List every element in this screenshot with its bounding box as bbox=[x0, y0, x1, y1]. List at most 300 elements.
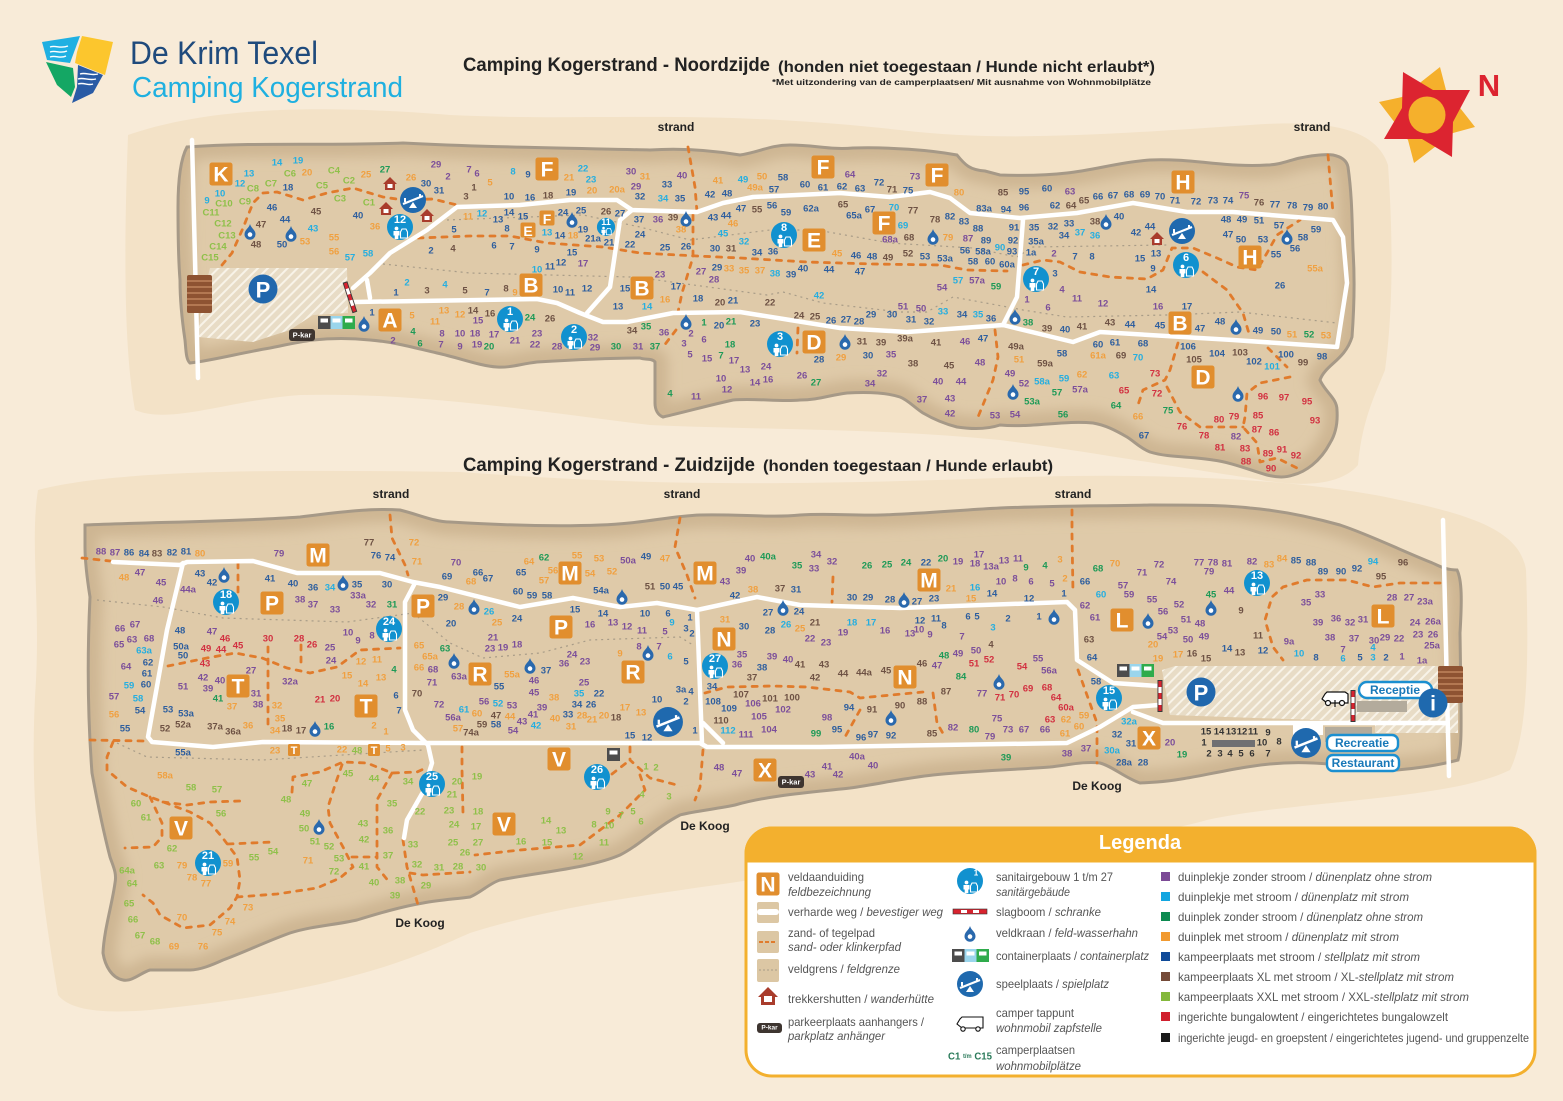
pitch numbers north: 53a bbox=[1024, 396, 1041, 408]
pitch numbers south: 86 bbox=[124, 548, 134, 558]
pitch numbers south: 43 bbox=[819, 660, 829, 670]
pitch numbers north: 73 bbox=[1208, 196, 1218, 206]
pitch numbers north: 11 bbox=[430, 316, 441, 328]
pitch numbers south: 60 bbox=[141, 680, 151, 690]
pitch numbers north: 101 bbox=[1264, 362, 1281, 372]
pitch numbers south: 80 bbox=[969, 724, 979, 736]
pitch numbers north: 32 bbox=[739, 236, 749, 248]
pitch numbers north: 57 bbox=[769, 184, 779, 196]
pitch numbers south: 58 bbox=[542, 590, 552, 602]
pitch numbers north: 48 bbox=[722, 188, 732, 200]
pitch numbers north: 42 bbox=[1131, 228, 1141, 238]
pitch numbers north: 59 bbox=[1059, 374, 1069, 384]
pitch numbers south: 28 bbox=[1387, 592, 1397, 604]
pitch numbers south: 7 bbox=[618, 810, 624, 822]
pitch numbers north: 47 bbox=[1223, 230, 1233, 240]
pitch numbers south: 13 bbox=[1226, 726, 1236, 738]
pitch numbers north: 18 bbox=[470, 328, 480, 340]
pitch numbers south: 70 bbox=[177, 912, 187, 924]
field boundaries north bbox=[383, 215, 1337, 323]
pitch numbers south: 59 bbox=[527, 590, 537, 602]
pitch numbers north: 21 bbox=[726, 316, 737, 328]
pitch numbers north: 90 bbox=[995, 242, 1005, 254]
pitch numbers north: 70 bbox=[1133, 352, 1143, 364]
pitch numbers north: 44 bbox=[1125, 320, 1136, 330]
trailer parking north bbox=[289, 329, 315, 341]
beach labels: strand bbox=[1294, 120, 1330, 134]
pitch numbers north: 60 bbox=[800, 180, 810, 190]
map: north field bbox=[178, 140, 1354, 477]
recreation label bbox=[1327, 735, 1398, 751]
pitch numbers south: 68 bbox=[1042, 682, 1052, 694]
pitch numbers south: 35 bbox=[792, 560, 803, 572]
pitch numbers north: 17 bbox=[1182, 302, 1192, 312]
pitch numbers north: 1a bbox=[1026, 248, 1037, 258]
pitch numbers north: 86 bbox=[1269, 428, 1279, 438]
legend: field letter: veldaanduiding bbox=[788, 870, 864, 884]
pitch numbers south: 82 bbox=[1247, 556, 1257, 568]
pitch numbers north: 49 bbox=[1237, 214, 1247, 226]
pitch numbers north: 88 bbox=[973, 224, 983, 234]
pitch numbers south: 59 bbox=[1079, 710, 1089, 722]
pitch numbers north: 35a bbox=[1028, 236, 1045, 248]
pitch numbers south: 54 bbox=[508, 726, 519, 736]
pitch numbers north: 21 bbox=[564, 172, 575, 184]
pitch numbers south: 36 bbox=[308, 582, 318, 594]
pitch numbers south: 102 bbox=[775, 704, 791, 716]
pitch numbers north: 28 bbox=[854, 316, 864, 328]
pitch numbers south: 1 bbox=[687, 612, 693, 624]
pitch numbers north: 25 bbox=[660, 242, 671, 254]
pitch numbers south: 33 bbox=[809, 564, 819, 574]
pitch numbers south: 6 bbox=[393, 690, 399, 702]
pitch numbers south: 32a bbox=[1121, 716, 1138, 728]
pitch numbers south: 52 bbox=[984, 654, 994, 666]
pitch numbers north: 33 bbox=[662, 180, 672, 190]
pitch numbers north: 48 bbox=[1215, 316, 1225, 328]
pitch numbers north: 60 bbox=[1093, 340, 1103, 350]
pitch numbers south: 45 bbox=[1206, 590, 1217, 600]
pitch numbers south: 44 bbox=[838, 668, 849, 680]
pitch numbers south: 8 bbox=[1012, 574, 1018, 584]
pitch numbers south: 12 bbox=[356, 656, 366, 668]
pitch numbers south: 43 bbox=[195, 568, 205, 580]
pitch numbers south: 8 bbox=[369, 630, 375, 642]
parking north hatched bbox=[198, 268, 348, 342]
pitch numbers south: 19 bbox=[498, 642, 508, 654]
pitch numbers north: 3 bbox=[681, 338, 687, 350]
field letters south bbox=[170, 544, 1394, 840]
pitch numbers north: 11 bbox=[565, 288, 576, 298]
pitch numbers south: 58 bbox=[491, 720, 501, 730]
pitch numbers south: 29 bbox=[863, 592, 873, 604]
pitch numbers south: 28 bbox=[454, 602, 464, 612]
pitch numbers north: 80 bbox=[1318, 202, 1328, 212]
pitch numbers south: 30 bbox=[476, 862, 486, 874]
pitch numbers north: 83 bbox=[959, 216, 969, 228]
pitch numbers south: 27 bbox=[912, 596, 922, 608]
pitch numbers south: 110 bbox=[713, 716, 729, 726]
legend: colour key: duinplekje zonder stroom / dünenplatz ohne strom bbox=[1178, 870, 1432, 884]
beach labels: De Koog bbox=[1072, 779, 1122, 793]
info icon: i bbox=[1430, 692, 1436, 716]
field letters south: L bbox=[1116, 610, 1129, 632]
pitch numbers south: 29 bbox=[1380, 632, 1390, 644]
pitch numbers north: 3 bbox=[424, 286, 430, 296]
pitch numbers south: 45 bbox=[881, 666, 892, 676]
pitch numbers north: 50 bbox=[916, 304, 926, 314]
map: south field bbox=[82, 505, 1463, 980]
pitch numbers north: 29 bbox=[866, 310, 876, 320]
legend: colour key bbox=[1161, 870, 1529, 1045]
pitch numbers south: 50 bbox=[660, 582, 670, 592]
pitch numbers south: 55 bbox=[1147, 594, 1158, 606]
pitch numbers south: 84 bbox=[956, 672, 967, 682]
pitch numbers south: 13 bbox=[556, 826, 566, 836]
pitch numbers south: 11 bbox=[931, 614, 942, 624]
parking sign south bbox=[1186, 678, 1216, 706]
pitch numbers south: 63 bbox=[127, 634, 137, 646]
pitch numbers north: 8 bbox=[503, 284, 509, 294]
legend title: Legenda bbox=[1099, 832, 1182, 854]
legend: sanitary: 1 bbox=[974, 868, 979, 878]
pitch numbers south: 48 bbox=[939, 650, 949, 662]
field letters south: M bbox=[309, 544, 327, 568]
pitch numbers north: 100 bbox=[1278, 350, 1294, 360]
pitch numbers north: 31 bbox=[434, 186, 445, 196]
pitch numbers north: 61a bbox=[1090, 350, 1107, 362]
pitch numbers south: 105 bbox=[751, 712, 768, 722]
pitch numbers north: 52 bbox=[1304, 330, 1314, 340]
pitch numbers south: 11 bbox=[1248, 726, 1259, 738]
pitch numbers south: 1 bbox=[692, 726, 698, 736]
pitch numbers south: 79 bbox=[985, 732, 995, 742]
pitch numbers south: 61 bbox=[1090, 612, 1101, 624]
legend: sand path: zand- of tegelpad bbox=[788, 926, 875, 940]
pitch numbers north: 69 bbox=[1116, 350, 1126, 362]
pitch numbers south: 94 bbox=[844, 702, 855, 714]
barriers south bbox=[1158, 680, 1356, 722]
pitch numbers north: 72 bbox=[874, 178, 884, 188]
pitch numbers north: 47 bbox=[978, 334, 988, 344]
sanitary buildings north: 7 bbox=[1033, 266, 1039, 278]
pitch numbers south: 14 bbox=[987, 588, 998, 600]
pitch numbers south: 14 bbox=[1222, 644, 1233, 654]
pitch numbers north: 17 bbox=[671, 282, 681, 292]
pitch numbers north: 14 bbox=[504, 208, 515, 218]
pitch numbers north: 34 bbox=[752, 248, 763, 258]
legend: paved road: verharde weg / bevestiger weg bbox=[788, 905, 943, 919]
pitch numbers north: 33 bbox=[724, 264, 734, 274]
field letters north: B bbox=[523, 274, 539, 298]
pitch numbers south: 36 bbox=[383, 826, 393, 836]
pitch numbers south: 48 bbox=[281, 794, 291, 806]
pitch numbers north: 55 bbox=[329, 232, 340, 244]
pitch numbers south: 1a bbox=[1417, 656, 1428, 666]
pitch numbers south: 20 bbox=[446, 618, 456, 630]
pitch numbers south: 8 bbox=[636, 642, 642, 652]
dune halo: north bbox=[125, 109, 1392, 484]
pitch numbers north: 70 bbox=[889, 202, 899, 214]
pitch numbers south: 1 bbox=[1201, 738, 1207, 748]
pitch numbers south: 1 bbox=[1036, 612, 1042, 622]
pitch numbers south: 30a bbox=[1104, 746, 1121, 756]
pitch numbers south: 83 bbox=[152, 548, 162, 560]
pitch numbers north: 104 bbox=[1209, 348, 1226, 360]
pitch numbers north: 91 bbox=[1277, 444, 1288, 456]
pitch numbers north: 47 bbox=[256, 220, 266, 230]
pitch numbers south: 47 bbox=[135, 568, 145, 578]
field letters north: F bbox=[541, 158, 554, 182]
pitch numbers north: 20 bbox=[484, 342, 494, 352]
logo shield bbox=[42, 36, 113, 103]
pitch numbers south: 47 bbox=[207, 626, 217, 638]
pitch numbers south: 62 bbox=[167, 844, 177, 854]
pitch numbers south: 56a bbox=[1041, 666, 1058, 676]
pitch numbers north: 64 bbox=[845, 170, 856, 180]
pitch numbers south: 90 bbox=[1336, 566, 1346, 578]
pitch numbers south: 60a bbox=[1058, 702, 1075, 714]
pitch numbers south: 54a bbox=[593, 586, 610, 596]
pitch numbers north: 5 bbox=[487, 178, 493, 188]
sanitary buildings north: 12 bbox=[394, 214, 406, 226]
pitch numbers south: 85 bbox=[927, 728, 938, 740]
pitch numbers north: 8 bbox=[1089, 252, 1095, 262]
pitch numbers north: 27 bbox=[615, 208, 625, 220]
pitch numbers south: 5 bbox=[662, 626, 668, 638]
pitch numbers north: C7 bbox=[265, 178, 277, 190]
pitch numbers north: 14 bbox=[272, 158, 283, 168]
pitch numbers south: 88 bbox=[917, 696, 927, 708]
pitch numbers south: 60 bbox=[1096, 590, 1106, 600]
pitch numbers south: 28 bbox=[885, 594, 895, 606]
pitch numbers south: 8 bbox=[1313, 652, 1319, 664]
pitch numbers north: 53 bbox=[1321, 330, 1331, 342]
pitch numbers south: 17 bbox=[620, 702, 630, 714]
pitch numbers south: 35 bbox=[737, 650, 748, 660]
wooden bridge south bbox=[1438, 666, 1463, 703]
pitch numbers north: 48 bbox=[867, 252, 877, 262]
pitch numbers south: 24 bbox=[512, 614, 523, 624]
legend panel bbox=[746, 828, 1535, 1076]
sanitary buildings north: 6 bbox=[1183, 252, 1189, 264]
pitch numbers north: 13 bbox=[542, 228, 552, 238]
pitch numbers south: 4 bbox=[391, 664, 397, 676]
pitch numbers south: 17 bbox=[974, 550, 984, 560]
pitch numbers south: 30 bbox=[1369, 636, 1379, 646]
pitch numbers south: 5 bbox=[630, 806, 636, 818]
pitch numbers north: 37 bbox=[634, 214, 644, 226]
pitch numbers south: 63 bbox=[1084, 634, 1094, 646]
reception label bbox=[1359, 682, 1432, 698]
pitch numbers south: 50a bbox=[620, 556, 637, 566]
pitch numbers north: 39 bbox=[876, 338, 886, 348]
pitch numbers south: 13 bbox=[1235, 648, 1245, 658]
legend: camper tap: wohnmobil zapfstelle bbox=[996, 1021, 1102, 1035]
pitch numbers south: 51 bbox=[969, 658, 980, 670]
pitch numbers north: 19 bbox=[578, 224, 588, 236]
pitch numbers south: 57 bbox=[453, 724, 463, 734]
pitch numbers south: 39 bbox=[1313, 618, 1323, 628]
pitch numbers north: 57a bbox=[1072, 384, 1089, 396]
legend: trailer parking: parkplatz anhänger bbox=[787, 1029, 886, 1043]
field letters south: X bbox=[758, 760, 772, 782]
pitch numbers north: 44 bbox=[1145, 222, 1156, 232]
pitch numbers south: 21 bbox=[315, 694, 326, 706]
pitch numbers south: 26 bbox=[1428, 630, 1438, 640]
pitch numbers north: 39 bbox=[668, 212, 678, 224]
pitch numbers north: 38 bbox=[676, 224, 686, 236]
pitch numbers north: 7 bbox=[1072, 252, 1078, 262]
pitch numbers south: 84 bbox=[139, 548, 150, 560]
legend: camper places: wohnmobilplätze bbox=[996, 1059, 1081, 1073]
pitch numbers south: 18 bbox=[473, 806, 483, 818]
pitch numbers north: 40 bbox=[1060, 324, 1070, 336]
legend: colour key: kampeerplaats met stroom / stellplatz mit strom bbox=[1178, 950, 1420, 964]
pitch numbers north: 80 bbox=[1214, 414, 1224, 426]
pitch numbers north: 66 bbox=[1133, 412, 1143, 422]
legend: hut: trekkershutten / wanderhütte bbox=[788, 992, 934, 1006]
pitch numbers north: 85 bbox=[1253, 410, 1264, 422]
pitch numbers south: 68 bbox=[428, 664, 438, 676]
pitch numbers north: 77 bbox=[908, 206, 918, 216]
pitch numbers north: 70 bbox=[1155, 192, 1165, 202]
pitch numbers south: 45 bbox=[529, 688, 540, 698]
pitch numbers north: 16 bbox=[1153, 302, 1163, 312]
pitch numbers north: 21 bbox=[510, 336, 521, 346]
pitch numbers north: 15 bbox=[567, 248, 578, 258]
pitch numbers south: 8 bbox=[941, 620, 947, 632]
pitch numbers south: 59 bbox=[223, 858, 233, 870]
pitch numbers north: 68a bbox=[882, 234, 899, 246]
parking sign north bbox=[248, 274, 278, 304]
pitch numbers south: 30 bbox=[382, 580, 392, 590]
pitch numbers north: 54 bbox=[937, 282, 948, 294]
pitch numbers south: 41 bbox=[213, 694, 224, 704]
field letters north: D bbox=[1195, 366, 1211, 390]
field letters south: T bbox=[371, 745, 378, 757]
pitch numbers north: 1 bbox=[471, 182, 477, 194]
pitch numbers north: 24 bbox=[525, 312, 536, 324]
pitch numbers south: 55 bbox=[120, 724, 131, 734]
field letters south: V bbox=[497, 814, 511, 836]
pitch numbers south: 53 bbox=[594, 554, 604, 564]
pitch numbers north: 62a bbox=[803, 204, 820, 214]
pitch numbers south: 48 bbox=[119, 572, 129, 584]
pitch numbers north: 23 bbox=[655, 270, 665, 280]
pitch numbers south: 14 bbox=[1214, 726, 1225, 738]
legend: hut bbox=[758, 987, 934, 1006]
legend: trailer parking: P-kar bbox=[761, 1024, 778, 1032]
pitch numbers south: 69 bbox=[169, 942, 179, 952]
pitch numbers south: 6 bbox=[665, 608, 671, 620]
pitch numbers south: 53a bbox=[178, 708, 195, 720]
pitch numbers south: 20 bbox=[1148, 640, 1158, 650]
pitch numbers south: 26 bbox=[460, 848, 470, 858]
pitch numbers south: 23 bbox=[270, 746, 280, 756]
pitch numbers south: 13 bbox=[608, 618, 618, 628]
pitch numbers north: 24 bbox=[794, 310, 805, 322]
title south: Camping Kogerstrand - Zuidzijde bbox=[463, 455, 755, 476]
pitch numbers north: 18 bbox=[693, 294, 703, 304]
pitch numbers north: 34 bbox=[865, 378, 876, 390]
pitch numbers south: 32a bbox=[282, 676, 299, 688]
pitch numbers north: 40 bbox=[353, 210, 363, 222]
pitch numbers north: 21 bbox=[728, 296, 739, 306]
pitch numbers south: 55 bbox=[494, 682, 505, 692]
pitch numbers south: 62 bbox=[1080, 600, 1090, 612]
pitch numbers north: 40 bbox=[798, 264, 808, 274]
pitch numbers south: 18 bbox=[970, 558, 980, 570]
pitch numbers north: C13 bbox=[218, 230, 236, 242]
legend: field letter: N bbox=[760, 874, 776, 896]
pitch numbers south: 14 bbox=[541, 816, 552, 826]
pitch numbers north: 18 bbox=[543, 190, 553, 202]
pitch numbers north: 1 bbox=[393, 288, 399, 298]
pitch numbers north: 49a bbox=[747, 182, 764, 194]
pitch numbers north: 26 bbox=[797, 370, 807, 382]
pitch numbers south: 15 bbox=[966, 594, 977, 604]
sanitary buildings north: 11 bbox=[601, 217, 611, 227]
field letters north: H bbox=[1175, 172, 1191, 194]
pitch numbers north: 42 bbox=[705, 190, 715, 200]
pitch numbers south: 47 bbox=[302, 778, 312, 790]
pitch numbers south: 30 bbox=[263, 634, 273, 644]
pitch numbers south: 4 bbox=[988, 640, 994, 650]
pitch numbers south: 35 bbox=[275, 714, 286, 724]
reception label: Receptie bbox=[1370, 683, 1420, 697]
pitch numbers south: 42 bbox=[198, 672, 208, 684]
pitch numbers south: 37a bbox=[207, 722, 224, 732]
pitch numbers south: 92 bbox=[1352, 564, 1362, 574]
pitch numbers south: 7 bbox=[656, 642, 662, 652]
pitch numbers south: 71 bbox=[412, 556, 423, 568]
field letters south: M bbox=[561, 562, 579, 586]
pitch numbers north: 6 bbox=[474, 168, 480, 180]
pitch numbers north: 56 bbox=[329, 246, 339, 258]
pitch numbers south: 21 bbox=[946, 584, 957, 594]
pitch numbers south: 3 bbox=[1057, 554, 1063, 566]
pitch numbers south: 71 bbox=[995, 692, 1006, 704]
pitch numbers south: 63 bbox=[1045, 714, 1055, 726]
pitch numbers north: 17 bbox=[729, 356, 739, 366]
pitch numbers north: 106 bbox=[1180, 342, 1196, 352]
pitch numbers south: 11 bbox=[372, 654, 383, 666]
pitch numbers north: 91 bbox=[1009, 222, 1020, 234]
parking sign north: P bbox=[256, 278, 270, 302]
pitch numbers north: 14 bbox=[642, 302, 653, 312]
pitch numbers north: 58 bbox=[968, 256, 978, 268]
pitch numbers south: 47 bbox=[932, 660, 942, 672]
pitch numbers south: 41 bbox=[528, 710, 539, 720]
pitch numbers south: 34 bbox=[707, 682, 718, 692]
pitch numbers north: 35 bbox=[886, 350, 897, 360]
pitch numbers south: 61 bbox=[141, 812, 152, 824]
pitch numbers south: 26 bbox=[484, 606, 494, 618]
pitch numbers south: 33 bbox=[330, 604, 340, 616]
pitch numbers south: 22 bbox=[337, 744, 347, 756]
pitch numbers north: 18 bbox=[283, 182, 293, 194]
recreation label: Recreatie bbox=[1335, 736, 1389, 750]
pitch numbers south: 25a bbox=[1424, 640, 1441, 652]
pitch numbers south: 37 bbox=[308, 600, 318, 610]
pitch numbers north: 19 bbox=[566, 188, 576, 198]
sanitary buildings north: 3 bbox=[777, 331, 783, 343]
legend: colour key: duinplekje met stroom / dünenplatz mit strom bbox=[1178, 890, 1409, 904]
pitch numbers north: 47 bbox=[1195, 324, 1205, 334]
pitch numbers north: 2 bbox=[1051, 248, 1057, 260]
pitch numbers south: 32 bbox=[827, 556, 837, 568]
